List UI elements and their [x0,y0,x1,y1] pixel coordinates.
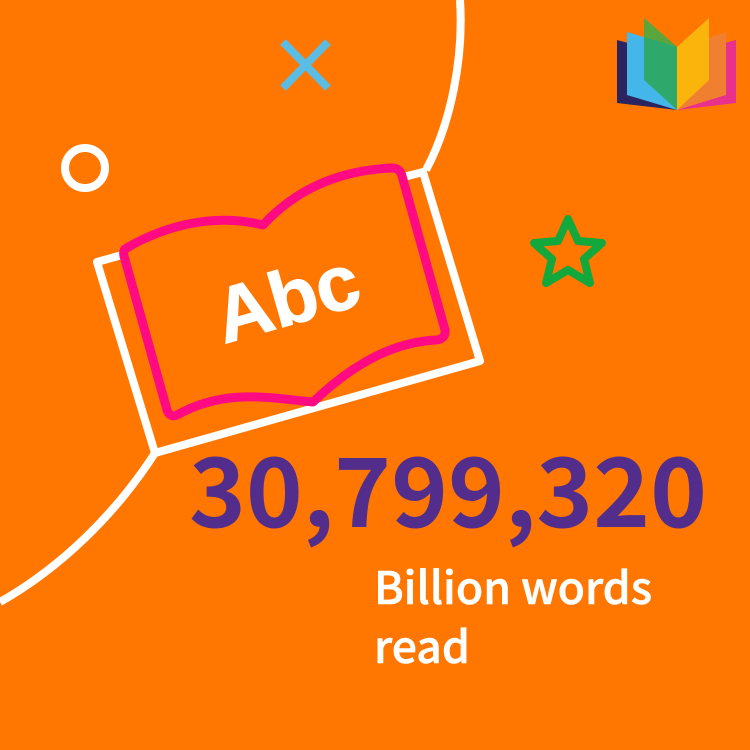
book label: Abc [204,236,369,360]
icon: open book outline [124,168,445,416]
white tilted rectangle frame [97,172,480,453]
curved white line: top arc [426,0,461,170]
icon: colourful book logo [617,18,736,110]
icon: blue cross [283,42,328,88]
big number: 30,799,320 [189,416,707,555]
caption: Billion words [374,552,652,617]
caption [374,552,652,676]
curved white line: bottom arc [0,453,155,602]
caption: read [374,611,470,676]
icon: green star [534,219,602,283]
icon: white circle [65,148,105,188]
